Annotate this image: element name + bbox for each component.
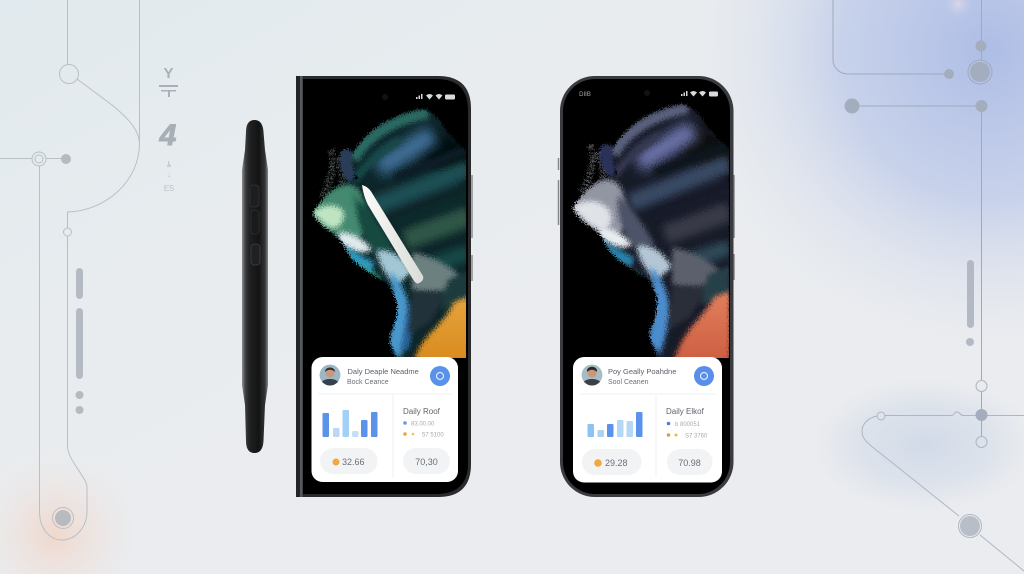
- stat pill 2: [667, 449, 712, 475]
- particle wisp: [582, 145, 603, 192]
- stat pill 2: 70,30: [415, 457, 438, 467]
- frame: [296, 76, 471, 497]
- stat pill 2: [403, 448, 450, 474]
- screen: [563, 79, 730, 494]
- stat pill 1: 32.66: [342, 457, 365, 467]
- label: E5: E5: [164, 183, 174, 193]
- circuit nodes: left: [55, 154, 84, 526]
- circuit lines: right: [833, 0, 1024, 571]
- card subtitle: Bock Ceance: [347, 379, 389, 386]
- action button: [430, 366, 450, 386]
- hinge strip: [296, 76, 302, 497]
- stylus: [362, 185, 423, 284]
- data card: [573, 357, 722, 482]
- legend: S7 3760: [685, 434, 708, 440]
- navy pocket: [599, 144, 616, 177]
- glyph: number 4: 4: [159, 119, 177, 152]
- data card: [312, 357, 458, 482]
- avatar: [320, 364, 340, 386]
- legend: 57 5100: [422, 432, 444, 438]
- camera: [382, 94, 388, 100]
- card title: Poy Geally Poahdne: [608, 367, 676, 376]
- avatar: [582, 364, 602, 386]
- glyph: small mark: ﾑ: [167, 160, 171, 169]
- wallpaper: [571, 102, 729, 358]
- screen: [303, 79, 468, 494]
- circuit lines: left: [0, 0, 140, 540]
- side buttons: [471, 175, 473, 281]
- action button: [694, 366, 714, 386]
- bar chart: [588, 412, 642, 437]
- stat pill 1: [320, 448, 378, 474]
- bar chart: [322, 410, 378, 437]
- glyph: down arrow: ↓: [167, 170, 171, 179]
- legend: [666, 407, 708, 440]
- camera: [644, 90, 650, 96]
- legend: Daily Roof: [403, 407, 441, 416]
- card title: Daly Deaple Neadme: [348, 367, 419, 376]
- legend: [403, 407, 444, 438]
- frame: [560, 76, 734, 497]
- side view phone: [242, 120, 268, 453]
- status icons: [681, 91, 718, 96]
- phone: standard: [558, 76, 735, 497]
- stat pill 1: 29.28: [605, 458, 628, 468]
- stat pill 2: 70.98: [678, 458, 701, 468]
- legend: Daily Elkof: [666, 407, 705, 416]
- side buttons: [558, 158, 734, 280]
- status icons: [416, 94, 455, 100]
- phone: foldable with pen: [296, 76, 475, 497]
- circuit nodes: right: [844, 40, 990, 536]
- legend: 83.00.00: [411, 422, 435, 428]
- legend: b 800051: [675, 422, 701, 428]
- wallpaper: [312, 108, 466, 358]
- clock: DIIB: [579, 92, 591, 98]
- particle wisp: [322, 150, 343, 197]
- glyph: Y over T: Y: [163, 65, 174, 82]
- stat pill 1: [582, 449, 642, 475]
- card subtitle: Sool Ceanen: [608, 379, 649, 386]
- spec glyphs: [159, 65, 178, 193]
- navy pocket: [339, 149, 356, 182]
